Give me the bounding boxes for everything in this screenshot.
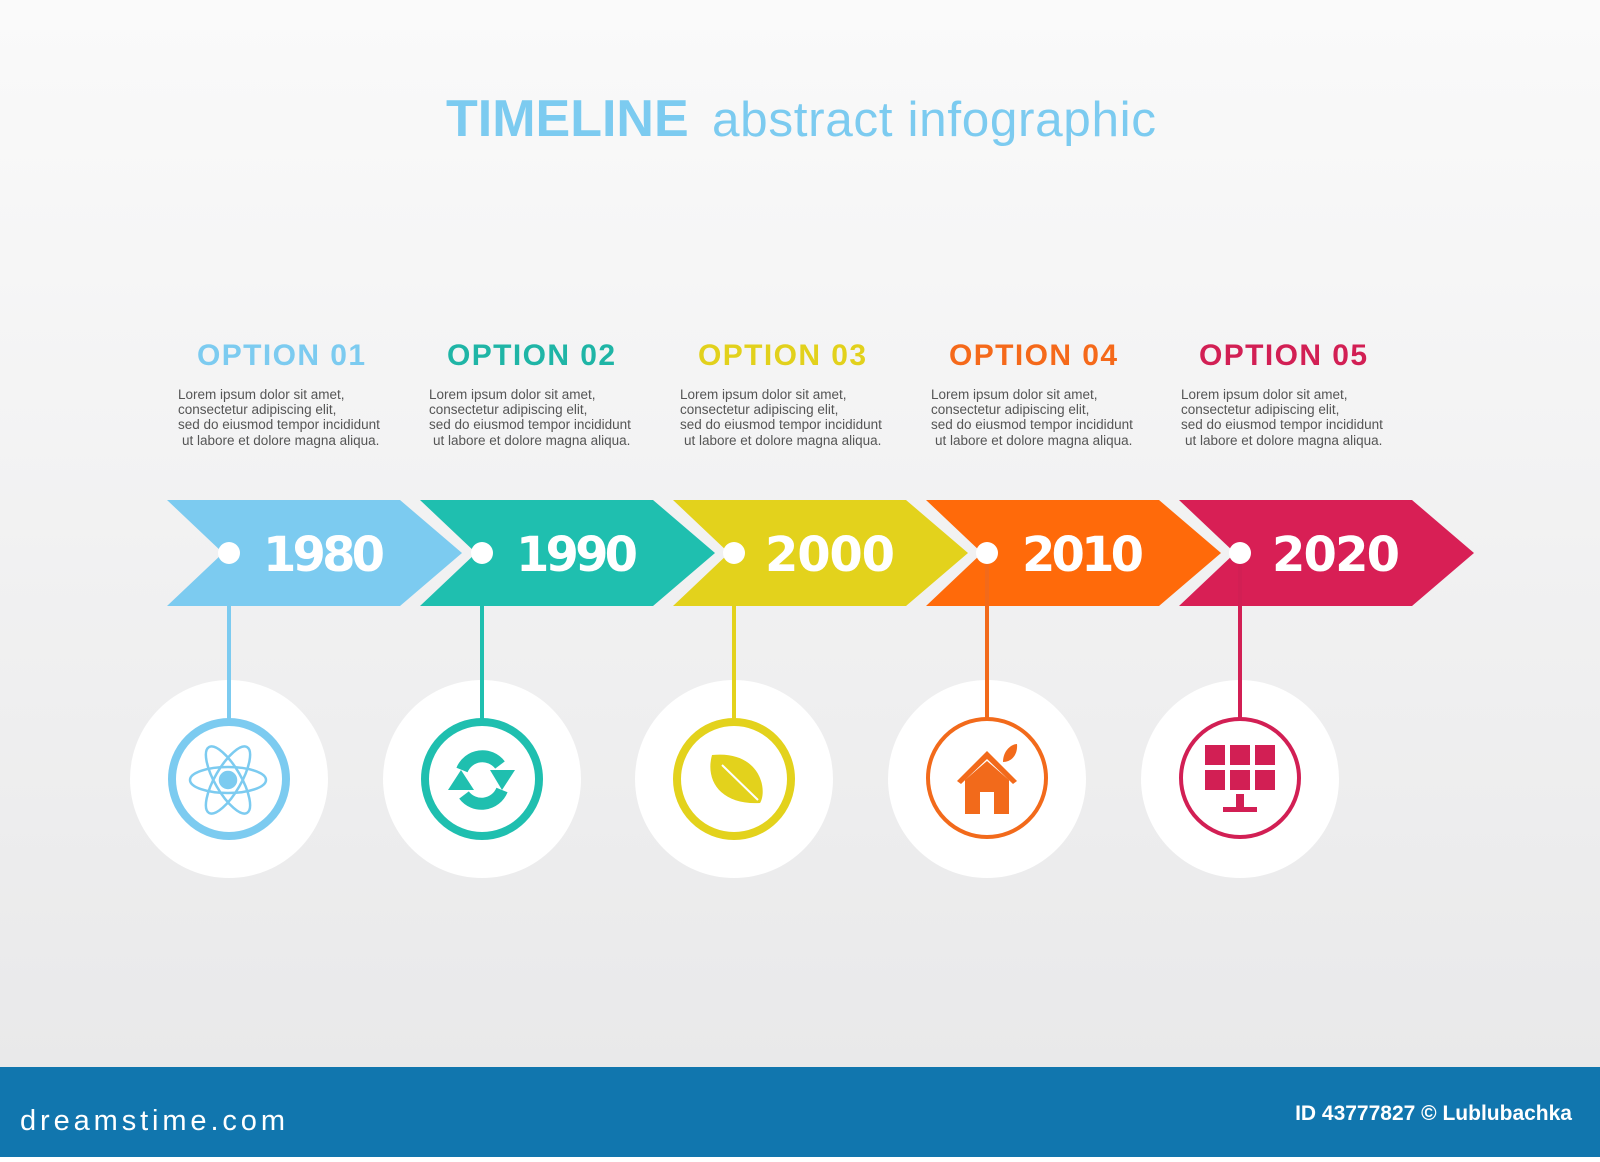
- option 05: sed do eiusmod tempor incididunt: [1181, 417, 1383, 432]
- option 03: ut labore et dolore magna aliqua.: [684, 433, 881, 448]
- icon: recycle arrows: [448, 756, 515, 804]
- arrow 1980: 1980: [263, 527, 385, 583]
- option 04: [931, 339, 1133, 448]
- option 03: Lorem ipsum dolor sit amet,: [680, 387, 847, 402]
- option 02: OPTION 02: [447, 339, 615, 372]
- option 02: Lorem ipsum dolor sit amet,: [429, 387, 596, 402]
- option 03: sed do eiusmod tempor incididunt: [680, 417, 882, 432]
- icon: leaf: [710, 755, 763, 803]
- option 02: [429, 339, 631, 448]
- white circles backgrounds: [130, 680, 1339, 878]
- footer: [0, 1067, 1600, 1157]
- option 02: sed do eiusmod tempor incididunt: [429, 417, 631, 432]
- option 05: ut labore et dolore magna aliqua.: [1185, 433, 1382, 448]
- option texts: [178, 339, 1383, 448]
- title: abstract infographic: [712, 92, 1156, 147]
- arrow 1990: [420, 500, 715, 836]
- footer: dreamstime.com: [20, 1105, 285, 1137]
- title: TIMELINE: [446, 90, 689, 148]
- option 04: ut labore et dolore magna aliqua.: [935, 433, 1132, 448]
- option 01: sed do eiusmod tempor incididunt: [178, 417, 380, 432]
- arrow 2010: 2010: [1022, 527, 1144, 583]
- option 02: ut labore et dolore magna aliqua.: [433, 433, 630, 448]
- option 01: [178, 339, 380, 448]
- arrow 2020: 2020: [1272, 527, 1400, 583]
- option 03: [680, 339, 882, 448]
- arrow 2000: [673, 500, 968, 836]
- option 05: OPTION 05: [1199, 339, 1367, 372]
- icon: solar panel: [1205, 745, 1275, 812]
- option 04: OPTION 04: [949, 339, 1117, 372]
- footer: ID 43777827 © Lublubachka: [1295, 1102, 1572, 1125]
- option 04: consectetur adipiscing elit,: [931, 402, 1089, 417]
- arrow 2010: [926, 500, 1221, 837]
- option 01: ut labore et dolore magna aliqua.: [182, 433, 379, 448]
- option 01: OPTION 01: [197, 339, 365, 372]
- option 04: sed do eiusmod tempor incididunt: [931, 417, 1133, 432]
- arrow 2000: 2000: [765, 527, 895, 583]
- option 04: Lorem ipsum dolor sit amet,: [931, 387, 1098, 402]
- arrow 1990: 1990: [516, 527, 638, 583]
- icon: atom: [190, 741, 266, 819]
- option 05: [1181, 339, 1383, 448]
- option 02: consectetur adipiscing elit,: [429, 402, 587, 417]
- option 03: consectetur adipiscing elit,: [680, 402, 838, 417]
- option 05: Lorem ipsum dolor sit amet,: [1181, 387, 1348, 402]
- option 05: consectetur adipiscing elit,: [1181, 402, 1339, 417]
- icon: eco house: [957, 744, 1017, 814]
- option 01: consectetur adipiscing elit,: [178, 402, 336, 417]
- arrow 2020: [1179, 500, 1474, 837]
- option 03: OPTION 03: [698, 339, 866, 372]
- option 01: Lorem ipsum dolor sit amet,: [178, 387, 345, 402]
- arrow 1980: [167, 500, 462, 836]
- title: [446, 90, 1156, 148]
